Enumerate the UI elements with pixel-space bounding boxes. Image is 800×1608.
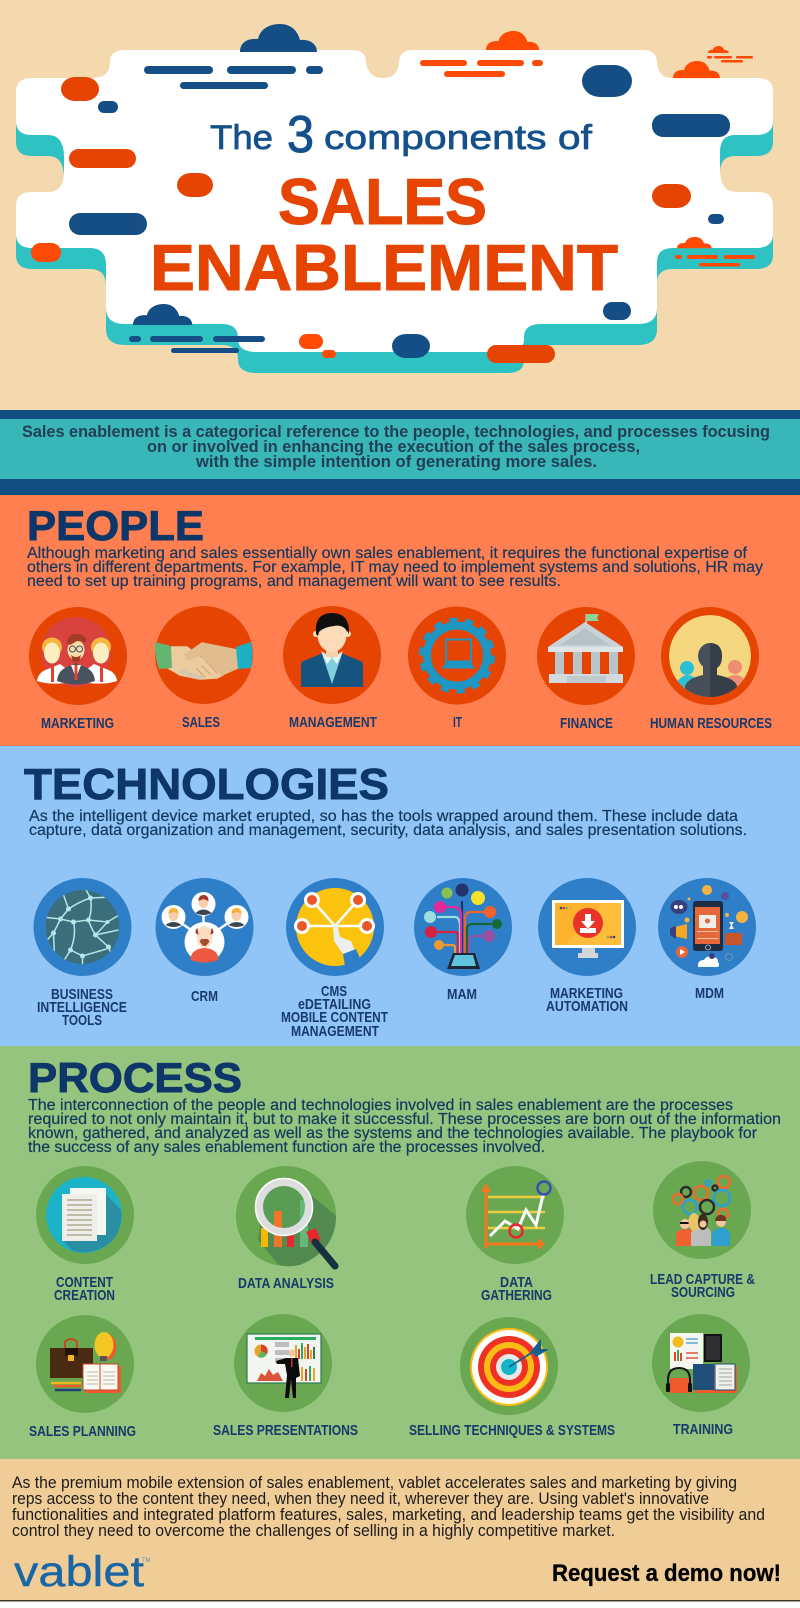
- process description: [28, 1097, 781, 1156]
- title: ENABLEMENT: [150, 231, 618, 304]
- title: The: [210, 119, 273, 157]
- process description: known, gathered, and analyzed as well as the systems and the technologies available. The playbook for: [28, 1125, 757, 1142]
- panel: people: [0, 495, 800, 746]
- label: people items: IT: [453, 714, 462, 731]
- call to action: Request a demo now!: [552, 1560, 781, 1587]
- floating blobs: [31, 65, 730, 363]
- label: technologies items: MDM: [695, 985, 724, 1002]
- heading: process: PROCESS: [28, 1054, 242, 1101]
- label: technologies items: MANAGEMENT: [291, 1023, 379, 1040]
- icon: sales planning: [36, 1315, 134, 1413]
- label: process items: LEAD CAPTURE &: [650, 1271, 755, 1288]
- icon: training: [652, 1314, 750, 1412]
- people description: need to set up training programs, and management will want to see results.: [27, 573, 561, 590]
- label: process items: [29, 1271, 755, 1440]
- label: process items: DATA ANALYSIS: [238, 1275, 334, 1292]
- clouds: [133, 24, 729, 325]
- label: process items: SALES PLANNING: [29, 1423, 136, 1440]
- icon: CMS hand: [286, 878, 384, 976]
- panel: process: [0, 1046, 800, 1459]
- heading: technologies: TECHNOLOGIES: [24, 760, 389, 809]
- icon: business intelligence globe: [34, 878, 132, 976]
- banner text: with the simple intention of generating more sales.: [195, 452, 597, 471]
- people description: [27, 545, 763, 590]
- footer text: control they need to overcome the challenges of selling in a highly competitive market.: [12, 1522, 615, 1540]
- panel: footer: [0, 1459, 800, 1602]
- footer text: As the premium mobile extension of sales enablement, vablet accelerates sales and marketing by giving: [12, 1474, 737, 1492]
- teal shadow of title cloud: [16, 71, 773, 373]
- label: technologies items: MARKETING: [550, 985, 623, 1002]
- process description: The interconnection of the people and technologies involved in sales enablement are the processes: [28, 1097, 733, 1114]
- icon: content creation: [36, 1166, 134, 1264]
- technologies description: As the intelligent device market erupted, so has the tools wrapped around them. These include data: [29, 808, 738, 825]
- process description: required to not only maintain it, but to make it successful. These processes are born out of the information: [28, 1111, 781, 1128]
- label: technologies items: AUTOMATION: [546, 998, 628, 1015]
- people description: others in different departments. For example, IT may need to implement systems and solutions, HR may: [27, 559, 763, 576]
- label: technologies items: MOBILE CONTENT: [281, 1009, 388, 1026]
- footer text: reps access to the content they need, when they need it, wherever they are. Using vablet's innovative: [12, 1490, 709, 1508]
- banner text: [22, 422, 770, 471]
- icon: marketing automation: [538, 878, 636, 976]
- label: people items: [41, 714, 772, 732]
- label: technologies items: INTELLIGENCE: [37, 999, 127, 1016]
- label: process items: SOURCING: [671, 1284, 735, 1301]
- technologies description: [29, 808, 747, 839]
- logo: vablet: vablet: [14, 1548, 144, 1596]
- icon: IT gear: [408, 606, 506, 704]
- label: process items: SELLING TECHNIQUES & SYSTEMS: [409, 1422, 615, 1439]
- icon: marketing: [29, 607, 127, 705]
- label: process items: GATHERING: [481, 1287, 552, 1304]
- icon: selling target: [460, 1317, 558, 1415]
- label: technologies items: CMS: [321, 983, 347, 1000]
- panel: title hero: [0, 0, 800, 410]
- title: 3: [287, 106, 314, 164]
- label: people items: MANAGEMENT: [289, 714, 377, 731]
- icon: data analysis: [236, 1166, 336, 1266]
- icon: MAM app tree: [414, 878, 512, 976]
- banner text: on or involved in enhancing the execution of the sales process,: [147, 437, 640, 456]
- icon: finance: [537, 607, 635, 705]
- icon: MDM phone: [658, 878, 756, 976]
- dashes: [129, 56, 755, 353]
- title: [150, 106, 618, 304]
- footer text: functionalities and integrated platform features, sales, marketing, and leadership teams get the visibility and: [12, 1506, 765, 1524]
- label: process items: TRAINING: [673, 1421, 733, 1438]
- label: technologies items: [37, 983, 724, 1040]
- label: process items: DATA: [500, 1274, 533, 1291]
- people description: Although marketing and sales essentially own sales enablement, it requires the functional expertise of: [27, 545, 748, 562]
- label: technologies items: CRM: [191, 988, 218, 1005]
- banner text: Sales enablement is a categorical reference to the people, technologies, and processes focusing: [22, 422, 770, 441]
- label: people items: SALES: [182, 714, 220, 731]
- label: process items: SALES PRESENTATIONS: [213, 1422, 358, 1439]
- panel: definition banner: [0, 410, 800, 495]
- footer text: [12, 1474, 765, 1540]
- title: components of: [324, 119, 593, 157]
- icon: human resources: [661, 607, 759, 705]
- logo: vablet: TM: [142, 1558, 151, 1564]
- label: process items: CREATION: [54, 1287, 115, 1304]
- icon: sales presentations: [234, 1314, 332, 1412]
- icon: data gathering chart: [466, 1166, 564, 1264]
- panel: technologies: [0, 746, 800, 1046]
- label: technologies items: TOOLS: [62, 1012, 102, 1029]
- label: technologies items: eDETAILING: [298, 996, 371, 1013]
- title: SALES: [278, 165, 487, 238]
- heading: people: PEOPLE: [27, 502, 204, 549]
- icon: lead capture: [653, 1161, 751, 1259]
- label: technologies items: MAM: [447, 986, 477, 1003]
- label: people items: FINANCE: [560, 715, 613, 732]
- white title cloud: [16, 50, 773, 352]
- icon: management: [283, 606, 381, 704]
- process description: the success of any sales enablement function are the processes involved.: [28, 1139, 545, 1156]
- technologies description: capture, data organization and management, security, data analysis, and sales presentation solutions.: [29, 822, 747, 839]
- icon: CRM: [156, 878, 254, 976]
- icon: handshake: [155, 606, 253, 704]
- label: technologies items: BUSINESS: [51, 986, 113, 1003]
- label: people items: MARKETING: [41, 715, 114, 732]
- label: process items: CONTENT: [56, 1274, 113, 1291]
